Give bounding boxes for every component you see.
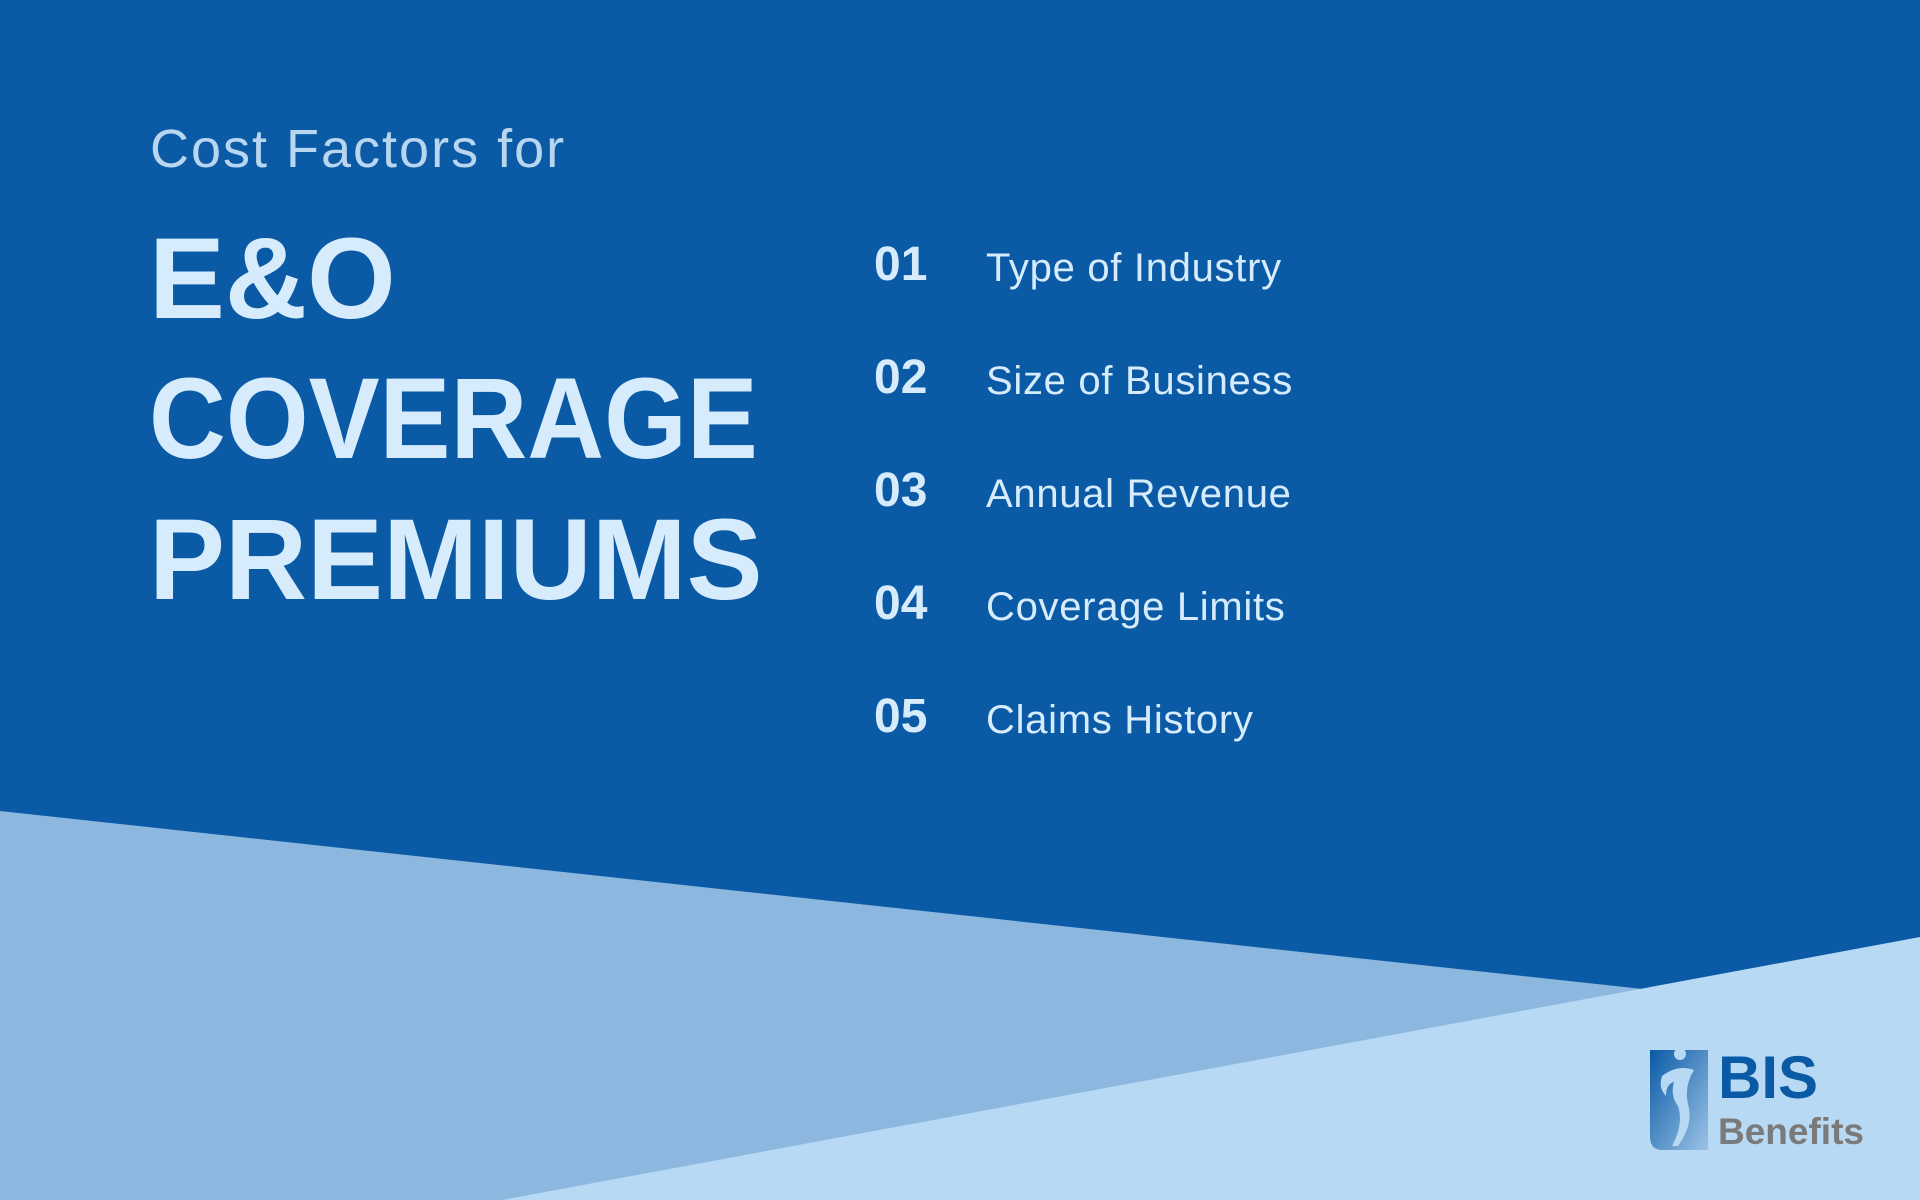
- list item 02: Size of Business: [986, 359, 1293, 403]
- list item 05: Claims History: [986, 698, 1254, 742]
- list item 02: [874, 351, 1293, 404]
- title line 2: COVERAGE: [149, 355, 758, 483]
- list item 03: [874, 464, 1292, 517]
- list item 03: Annual Revenue: [986, 472, 1292, 516]
- list item 04: 04: [874, 577, 927, 630]
- list item 02: 02: [874, 351, 927, 404]
- list item 04: [874, 577, 1286, 630]
- logo text BIS: BIS: [1718, 1044, 1818, 1111]
- logo text Benefits: Benefits: [1718, 1111, 1864, 1152]
- subtitle: Cost Factors for: [150, 119, 566, 179]
- list item 04: Coverage Limits: [986, 585, 1286, 629]
- title line 3: PREMIUMS: [149, 496, 763, 624]
- list item 05: [874, 690, 1254, 743]
- list item 05: 05: [874, 690, 927, 743]
- list item 01: Type of Industry: [986, 246, 1282, 290]
- logo: [1650, 1044, 1864, 1152]
- icon: shield figure: [1650, 1050, 1708, 1150]
- list item 01: 01: [874, 238, 927, 291]
- title: [149, 215, 763, 624]
- title line 1: E&O: [149, 215, 396, 343]
- list item 01: [874, 238, 1282, 291]
- list item 03: 03: [874, 464, 927, 517]
